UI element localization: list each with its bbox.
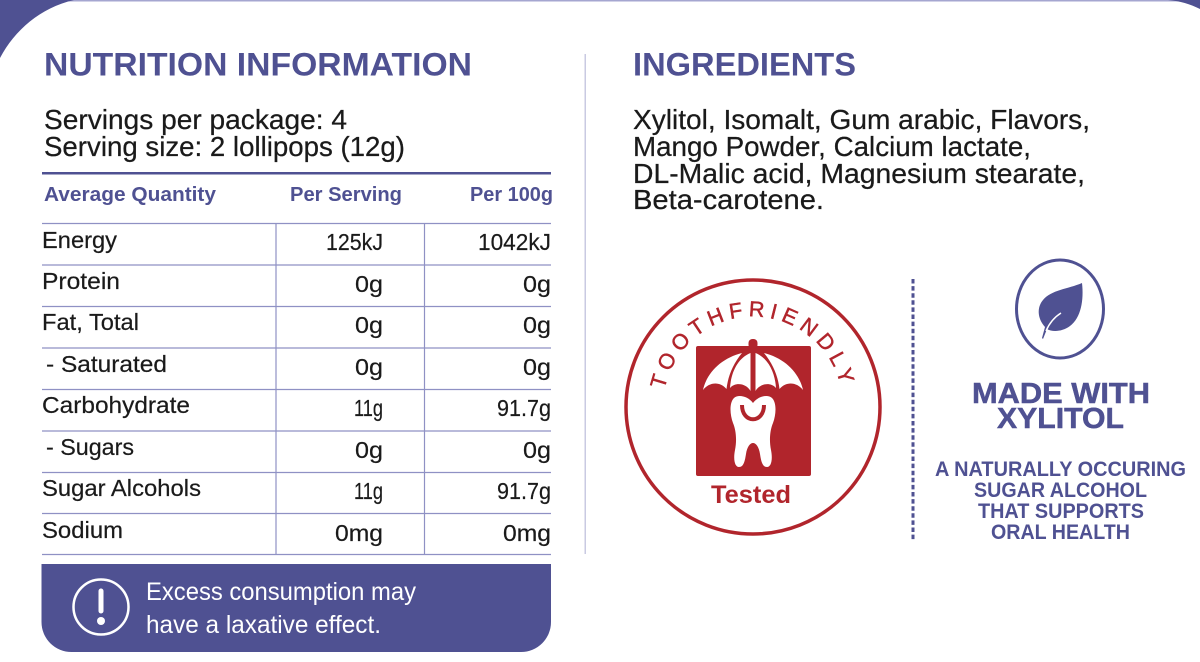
heading: ingredients: INGREDIENTS bbox=[633, 46, 856, 82]
callout text: have a laxative effect. bbox=[146, 611, 381, 639]
row: protein: 0g bbox=[523, 271, 551, 297]
row: energy bbox=[42, 227, 551, 255]
row: saturated: 0g bbox=[355, 354, 383, 380]
text block: xylitol description bbox=[935, 458, 1186, 544]
text block: serving details: Servings per package: 4 bbox=[44, 104, 347, 135]
row: sodium: Sodium bbox=[42, 517, 123, 543]
text block: ingredients list bbox=[633, 104, 1090, 215]
icon: umbrella and tooth bbox=[696, 339, 811, 476]
badge: toothfriendly tested bbox=[624, 278, 882, 536]
row: energy: 1042kJ bbox=[478, 229, 551, 255]
table header: Per 100g bbox=[470, 184, 553, 206]
row: sugars: - Sugars bbox=[46, 434, 134, 460]
row: carbohydrate bbox=[42, 392, 551, 421]
corner: top right bbox=[1168, 0, 1200, 9]
row: sugar alcohols bbox=[42, 475, 551, 504]
table header: Per Serving bbox=[290, 184, 402, 206]
row: fat total: 0g bbox=[523, 312, 551, 338]
text block: xylitol description: THAT SUPPORTS bbox=[978, 500, 1144, 523]
row: sodium: 0mg bbox=[335, 520, 383, 546]
text block: xylitol description: A NATURALLY OCCURING bbox=[935, 458, 1186, 481]
row: carbohydrate: 11g bbox=[354, 395, 383, 421]
badge label: tested: Tested bbox=[711, 481, 791, 509]
row: fat total: Fat, Total bbox=[42, 309, 139, 335]
row: energy: Energy bbox=[42, 227, 118, 253]
row: sugars: 0g bbox=[355, 437, 383, 463]
heading: made with xylitol bbox=[972, 378, 1150, 435]
row: fat total bbox=[42, 309, 551, 338]
row: saturated bbox=[46, 351, 551, 380]
row: sodium bbox=[42, 517, 551, 546]
heading: made with xylitol: MADE WITH bbox=[972, 378, 1150, 410]
row: fat total: 0g bbox=[355, 312, 383, 338]
row: saturated: 0g bbox=[523, 354, 551, 380]
icon: leaf bbox=[1016, 260, 1104, 358]
row: sugars: 0g bbox=[523, 437, 551, 463]
text block: serving details bbox=[44, 104, 405, 162]
row: saturated: - Saturated bbox=[46, 351, 167, 377]
table header: Average Quantity bbox=[44, 184, 217, 206]
row: protein bbox=[42, 268, 551, 297]
row: sugar alcohols: 91.7g bbox=[497, 478, 551, 504]
text block: ingredients list: DL-Malic acid, Magnesium stearate, bbox=[633, 158, 1085, 189]
text block: ingredients list: Beta-carotene. bbox=[633, 184, 824, 215]
badge curved text: TOOTHFRIENDLY bbox=[650, 301, 855, 386]
callout text: Excess consumption may bbox=[146, 578, 416, 606]
text block: xylitol description: ORAL HEALTH bbox=[991, 521, 1130, 544]
row: carbohydrate: 91.7g bbox=[497, 395, 551, 421]
row: energy: 125kJ bbox=[326, 229, 383, 255]
row: protein: Protein bbox=[42, 268, 120, 294]
row: sugar alcohols: 11g bbox=[354, 478, 383, 504]
text block: ingredients list: Mango Powder, Calcium lactate, bbox=[633, 131, 1031, 162]
text block: xylitol description: SUGAR ALCOHOL bbox=[974, 479, 1147, 502]
callout text bbox=[146, 578, 416, 639]
table header bbox=[44, 184, 553, 206]
corner: top left bbox=[0, 0, 74, 58]
heading: made with xylitol: XYLITOL bbox=[997, 403, 1124, 435]
row: protein: 0g bbox=[355, 271, 383, 297]
nutrition table bbox=[42, 172, 553, 555]
icon: exclamation bbox=[74, 580, 128, 634]
text block: ingredients list: Xylitol, Isomalt, Gum arabic, Flavors, bbox=[633, 104, 1090, 135]
text block: serving details: Serving size: 2 lollipops (12g) bbox=[44, 131, 405, 162]
callout: laxative warning bbox=[42, 564, 551, 652]
row: sugars bbox=[46, 434, 551, 463]
heading: nutrition information: NUTRITION INFORMATION bbox=[44, 46, 472, 82]
row: sodium: 0mg bbox=[503, 520, 551, 546]
row: sugar alcohols: Sugar Alcohols bbox=[42, 475, 201, 501]
row: carbohydrate: Carbohydrate bbox=[42, 392, 190, 418]
